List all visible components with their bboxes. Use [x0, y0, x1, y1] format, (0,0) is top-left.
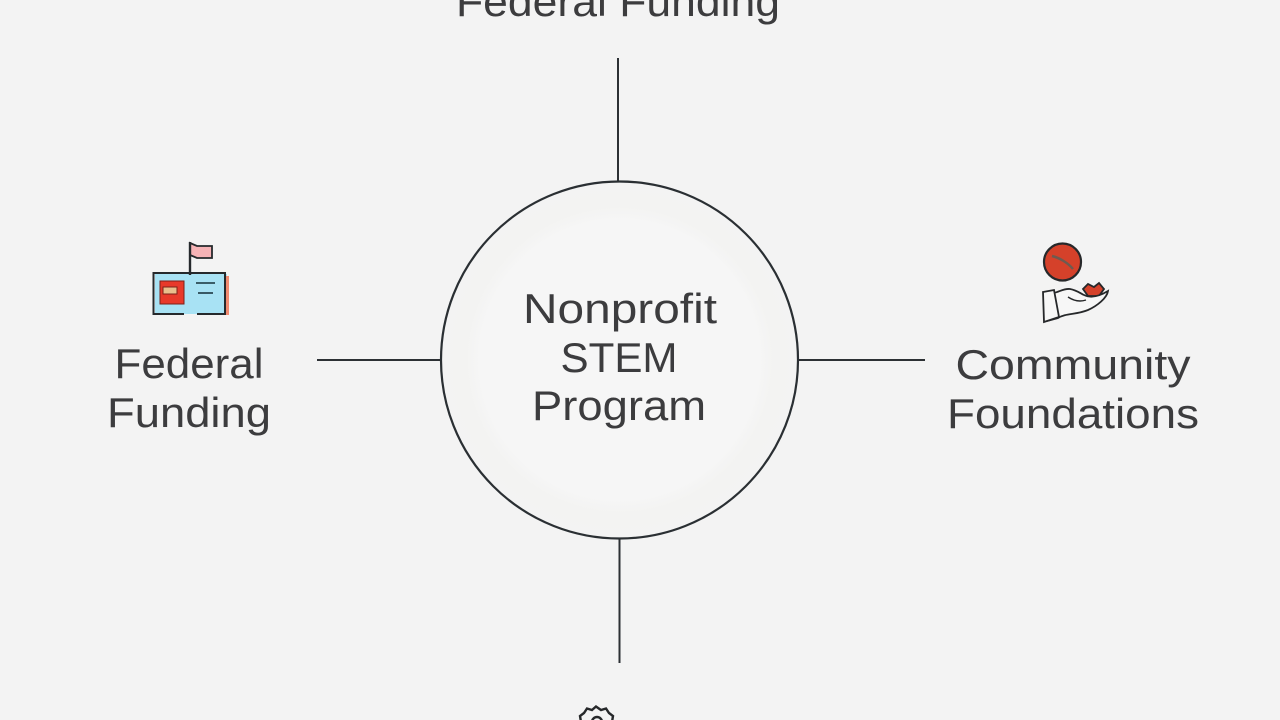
central label	[523, 285, 717, 429]
connector: top	[617, 58, 619, 181]
central hub circle	[441, 182, 798, 538]
central label: STEM	[560, 334, 678, 381]
icon: gear (cropped at bottom)	[580, 706, 613, 720]
icon: hand holding coin	[1043, 244, 1108, 322]
connector: right	[799, 359, 925, 361]
central label: Program	[532, 382, 706, 429]
right label: Community Foundations: Community	[956, 341, 1190, 388]
left label: Federal Funding: Funding	[107, 389, 271, 436]
connector: left	[317, 359, 440, 361]
left label: Federal Funding: Federal	[114, 340, 264, 387]
connector: bottom	[618, 539, 620, 663]
left label: Federal Funding	[107, 340, 271, 436]
icon: federal building card with flag	[154, 242, 229, 316]
right label: Community Foundations: Foundations	[947, 390, 1199, 437]
right label: Community Foundations	[947, 341, 1199, 437]
central label: Nonprofit	[523, 285, 717, 332]
